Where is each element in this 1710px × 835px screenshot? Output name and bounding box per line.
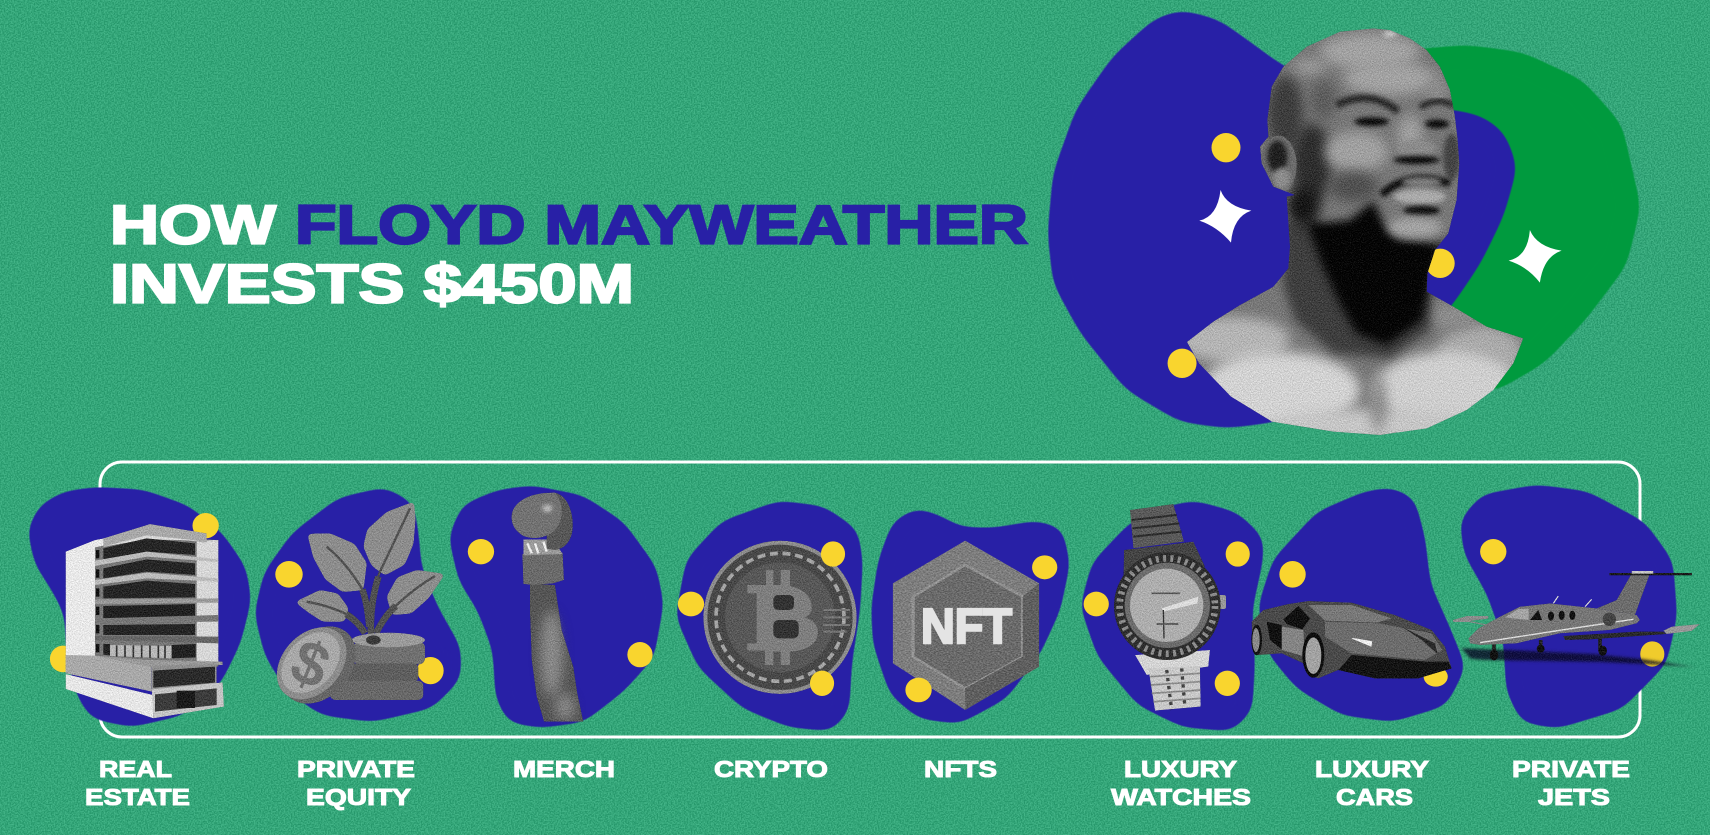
label: real estate: ESTATE [85,784,190,810]
blob and dots [252,485,463,724]
dot [1426,249,1455,278]
blob and badge [869,506,1072,726]
blob and dots [1078,499,1265,733]
label: private equity [297,756,415,810]
ear [1260,136,1297,194]
portrait backdrop [1045,7,1643,431]
plant and coins: $ [281,626,339,703]
dot [1212,133,1240,162]
jet [1453,571,1700,667]
watch [1114,504,1226,711]
portrait panel [1045,7,1643,442]
label: luxury cars [1315,756,1429,810]
item: NFTs [869,506,1072,726]
label: private jets: JETS [1538,784,1610,810]
sparkle [1509,230,1562,283]
blob: green [1362,43,1643,395]
title [110,194,1028,314]
item: merch [446,483,666,730]
label: real estate [85,756,190,810]
item: private jets [1453,483,1700,731]
sparkle [1199,190,1251,243]
label: luxury watches [1111,756,1251,810]
portrait bust [1177,27,1530,442]
blob and dots [446,483,666,730]
car [1251,601,1452,678]
building [66,524,224,718]
item: private equity [252,485,463,724]
boxing arm [512,493,583,722]
title line 1: HOW: HOW [110,194,276,256]
label: private jets [1512,756,1630,810]
item: crypto [673,499,865,733]
blob: blue [1045,7,1520,431]
dot [1168,349,1197,378]
leaves [295,502,445,622]
label: luxury watches: WATCHES [1111,784,1251,810]
dots [678,541,845,696]
title line 2: INVESTS $450M: INVESTS $450M [110,252,634,314]
blob and dots [1256,485,1468,724]
plant and coins [263,502,445,719]
label: private equity: EQUITY [306,784,411,810]
label: luxury cars: LUXURY [1315,756,1429,782]
title line 1: FLOYD MAYWEATHER: FLOYD MAYWEATHER [295,194,1028,256]
blob and dots [25,485,253,729]
category labels [85,756,1630,810]
items panel frame [100,462,1640,737]
bitcoin coin [703,541,857,694]
label: private jets: PRIVATE [1512,756,1630,782]
label: nfts: NFTS [924,756,997,782]
label: crypto: CRYPTO [714,756,828,782]
item: real estate [25,485,253,729]
label: private equity: PRIVATE [297,756,415,782]
item: luxury watches [1078,499,1265,733]
blob and dots [1458,483,1679,731]
label: luxury cars: CARS [1336,784,1413,810]
NFT badge text: NFT [921,600,1012,654]
item: luxury cars [1251,485,1468,724]
blob [673,499,865,733]
label: real estate: REAL [99,756,172,782]
label: merch: MERCH [513,756,615,782]
label: luxury watches: LUXURY [1124,756,1237,782]
